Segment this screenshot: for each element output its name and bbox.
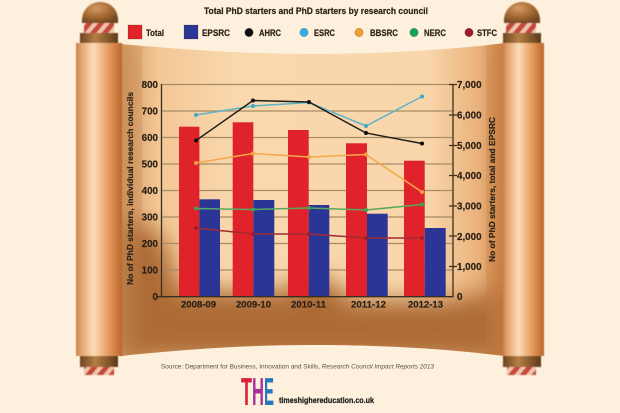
bars: Total [179,122,425,297]
left roller top base [80,33,118,43]
legend: Total: Total [146,27,164,38]
right axis labels: 2,000 [457,232,482,243]
right axis labels: 7,000 [457,80,482,91]
left axis labels: 100 [142,266,159,276]
right axis labels: 6,000 [457,110,482,122]
left axis labels: 200 [142,239,159,250]
left roller bottom base [80,356,118,367]
legend: BBSRC: BBSRC [370,27,398,38]
right axis labels: 0 [457,292,463,303]
x axis labels: 2011-12 [351,298,386,310]
left axis labels: 800 [142,80,159,91]
chart [125,80,497,310]
legend: AHRC: AHRC [259,27,281,38]
legend: ESRC: ESRC [314,27,335,38]
left axis title: No of PhD starters, individual research councils [125,92,135,285]
left axis labels [142,80,159,303]
left axis labels: 600 [142,133,159,144]
right axis labels: 3,000 [457,202,482,212]
left roller bottom stripes [84,367,114,375]
left axis labels: 500 [142,160,159,170]
THE logo [241,371,375,413]
legend: EPSRC: EPSRC [202,27,230,38]
THE logo: H [252,371,264,413]
right roller [503,2,544,375]
right axis title: No of PhD starters, total and EPSRC [487,117,497,262]
line: AHRC [194,98,424,146]
right axis labels: 4,000 [457,171,482,182]
legend: Total [128,25,164,39]
legend: AHRC [245,27,281,38]
left roller [76,2,122,375]
right roller body [503,43,544,356]
line: ESRC [194,94,424,128]
right axis labels [457,80,482,303]
right roller top stripes [506,23,536,34]
legend: STFC: STFC [477,27,497,38]
right axis labels: 5,000 [457,141,482,152]
logo URL: timeshighereducation.co.uk [279,396,375,405]
x axis labels [181,298,443,310]
legend [128,25,497,39]
x axis labels: 2010-11 [291,298,326,310]
left axis labels: 300 [142,212,159,224]
scroll parchment [118,40,508,360]
axes [157,84,457,297]
title: Total PhD starters and PhD starters by research council [204,6,428,16]
bars: EPSRC [199,199,446,297]
right roller bottom base [503,356,541,367]
legend: NERC: NERC [424,27,446,38]
left roller top dome [82,2,118,23]
THE logo: T [241,371,252,413]
line: STFC [194,226,424,240]
right roller bottom stripes [507,367,536,375]
left roller body [76,43,122,356]
line: NERC [194,202,424,212]
x axis labels: 2009-10 [236,298,271,310]
legend: BBSRC [355,27,398,38]
legend: NERC [410,27,446,38]
right axis labels: 1,000 [457,262,482,273]
left axis labels: 700 [142,106,159,118]
left axis labels: 0 [153,292,159,303]
source note: Source: Department for Business, Innovation and Skills, Research Council Impact Reports 2013 [161,364,434,370]
legend: EPSRC [184,25,230,39]
infographic [75,1,545,405]
line: BBSRC [194,152,424,194]
grid lines [161,84,453,270]
legend: STFC [465,27,497,38]
legend: ESRC [300,27,335,38]
left roller top stripes [84,23,114,34]
x axis labels: 2012-13 [408,298,443,310]
x axis labels: 2008-09 [181,298,216,310]
right roller top base [503,33,541,43]
THE logo: E [264,371,274,413]
left axis labels: 400 [142,186,159,197]
right roller top dome [504,2,540,23]
